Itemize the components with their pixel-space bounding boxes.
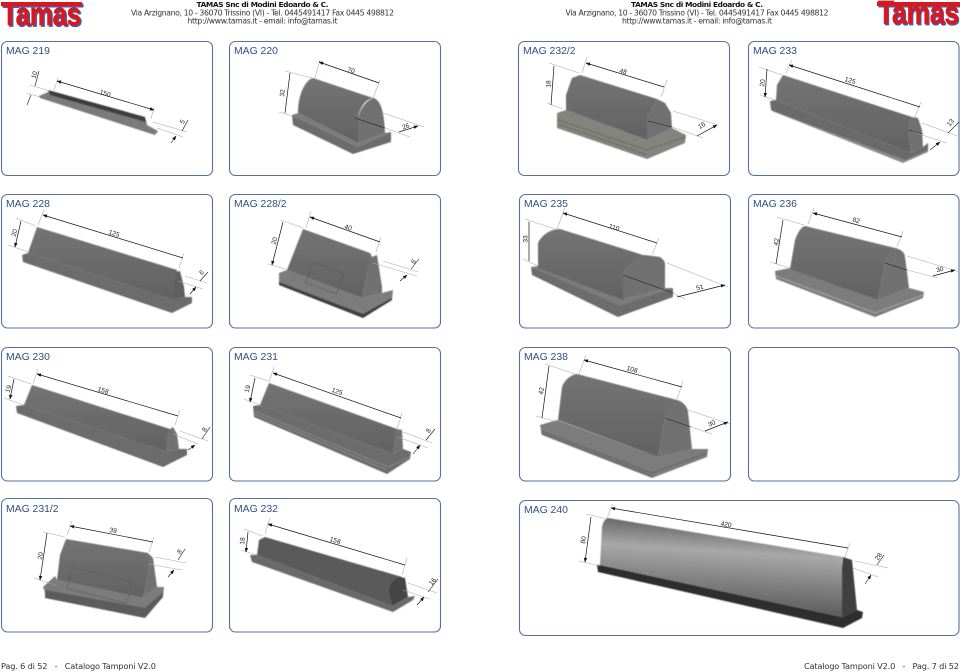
dimensions: MAG 219 [27,70,188,143]
title: MAG 220: MAG 220 [234,46,278,57]
dimensions: MAG 235: 33 [522,235,530,243]
footer left: Pag. 6 di 52 - Catalogo Tamponi V2.0 [1,661,156,671]
header text right: Via Arzignano, 10 - 36070 Trissino (VI) - Tel. 0445491417 Fax 0445 498812 [566,8,829,18]
product: MAG 228/2 [279,229,393,318]
panel: MAG 235 [520,194,730,328]
title: MAG 235: MAG 235 [524,199,568,210]
panel: MAG 231 [230,348,440,481]
header text left: Via Arzignano, 10 - 36070 Trissino (VI) - Tel. 0445491417 Fax 0445 498812 [131,8,394,18]
panel: MAG 228 [2,194,212,328]
panel: MAG 238 [520,348,730,481]
dimensions: MAG 231: 19 [244,384,252,393]
dimensions: MAG 220 [279,60,424,137]
panel: MAG 236 [748,194,960,328]
product: MAG 238 [540,374,708,478]
title: MAG 219: MAG 219 [6,46,50,57]
dimensions: MAG 231: 8 [425,427,433,435]
header text left: http://www.tamas.it - email: info@tamas.it [188,16,338,26]
dimensions: MAG 240 [579,504,888,584]
dimensions: MAG 236: 82 [852,217,861,225]
title: MAG 240: MAG 240 [524,505,568,516]
product: MAG 230 [16,385,187,467]
dimensions: MAG 235: 51 [696,284,705,292]
dimensions: MAG 228/2: 6 [410,258,418,266]
title: MAG 236: MAG 236 [753,199,797,210]
panel: MAG 233 [748,42,960,176]
panel: MAG 230 [2,348,212,481]
product: MAG 233 [770,75,928,163]
dimensions: MAG 233: 125 [844,76,857,86]
dimensions: MAG 231/2: 20 [37,551,45,560]
product: MAG 236 [775,226,924,317]
dimensions: MAG 228: 125 [108,229,121,239]
dimensions: MAG 240: 420 [720,521,732,529]
title: MAG 231/2: MAG 231/2 [6,504,59,515]
dimensions: MAG 236 [770,208,960,278]
dimensions: MAG 231/2 [34,521,186,585]
header text left: TAMAS Snc di Modini Edoardo & C. [196,0,329,9]
dimensions: MAG 235 [522,208,728,299]
dimensions: MAG 220: 32 [279,89,287,97]
dimensions: MAG 238: 42 [538,386,546,395]
product: MAG 232/2 [557,75,686,159]
dimensions: MAG 230 [4,369,210,450]
dimensions: MAG 231: 125 [331,387,344,397]
panel: MAG 232/2 [518,42,730,176]
dimensions: MAG 232/2: 48 [618,68,628,77]
dimensions: MAG 238: 108 [626,365,639,375]
product: MAG 240 [597,518,863,628]
dimensions: MAG 228/2: 20 [271,236,279,245]
product: MAG 219 [39,90,158,135]
panel: empty [748,348,959,481]
panel: MAG 228/2 [230,194,440,328]
dimensions: MAG 231/2: 39 [109,527,118,535]
product: MAG 232 [250,537,415,612]
product: MAG 220 [292,78,391,154]
dimensions: MAG 219: 10 [31,70,40,80]
dimensions: MAG 228: 6 [198,269,206,277]
title: MAG 233: MAG 233 [753,46,797,57]
dimensions: MAG 230: 19 [5,384,13,393]
dimensions: MAG 220: 26 [401,122,411,132]
dimensions: MAG 232: 16 [428,577,438,587]
product: MAG 228 [22,227,192,313]
title: MAG 232: MAG 232 [234,504,278,515]
panel: MAG 232 [230,498,440,632]
header text left [131,0,394,26]
footer right: Catalogo Tamponi V2.0 - Pag. 7 di 52 [804,661,959,671]
title: MAG 228: MAG 228 [6,199,50,210]
dimensions: MAG 228/2: 40 [343,223,353,233]
dimensions: MAG 233: 20 [759,79,767,87]
header text right: http://www.tamas.it - email: info@tamas.it [622,16,772,26]
dimensions: MAG 220: 70 [346,67,356,76]
dimensions: MAG 231/2: 8 [176,548,184,556]
title: MAG 230: MAG 230 [6,352,50,363]
title: MAG 231: MAG 231 [234,352,278,363]
product: MAG 235 [531,229,673,317]
dimensions: MAG 240: 28 [874,552,884,562]
dimensions: MAG 233: 13 [946,118,956,128]
dimensions: MAG 238: 30 [707,419,717,429]
dimensions: MAG 235: 110 [608,223,620,233]
dimensions: MAG 232/2 [546,57,718,138]
dimensions: MAG 233 [759,60,960,150]
dimensions: MAG 232/2: 16 [697,121,707,131]
dimensions: MAG 230: 158 [97,386,110,396]
dimensions: MAG 219: 5 [179,118,187,125]
title: MAG 232/2: MAG 232/2 [523,46,576,57]
dimensions: MAG 230: 8 [201,426,209,434]
dimensions: MAG 236: 30 [936,266,945,274]
dimensions: MAG 228/2 [268,211,419,281]
dimensions: MAG 232/2: 18 [546,80,552,88]
dimensions: MAG 232: 158 [329,536,342,546]
dimensions: MAG 232 [239,518,438,605]
dimensions: MAG 232: 18 [239,537,247,545]
dimensions: MAG 228 [8,210,208,294]
dimensions: MAG 240: 80 [580,535,588,544]
dimensions: MAG 238 [536,355,730,434]
panel: MAG 240 [520,500,959,636]
panel: MAG 220 [230,42,440,176]
dimensions: MAG 236: 42 [773,237,781,246]
title: MAG 238: MAG 238 [524,352,568,363]
header text right [566,0,829,26]
product: MAG 231 [253,383,411,474]
panel: MAG 219 [2,42,212,176]
title: MAG 228/2: MAG 228/2 [234,199,287,210]
dimensions: MAG 228: 20 [11,228,19,237]
product: MAG 231/2 [43,539,164,618]
dimensions: MAG 219: 150 [99,89,112,99]
dimensions: MAG 231 [244,367,435,454]
header text right: TAMAS Snc di Modini Edoardo & C. [631,0,763,9]
panel: MAG 231/2 [2,498,212,632]
